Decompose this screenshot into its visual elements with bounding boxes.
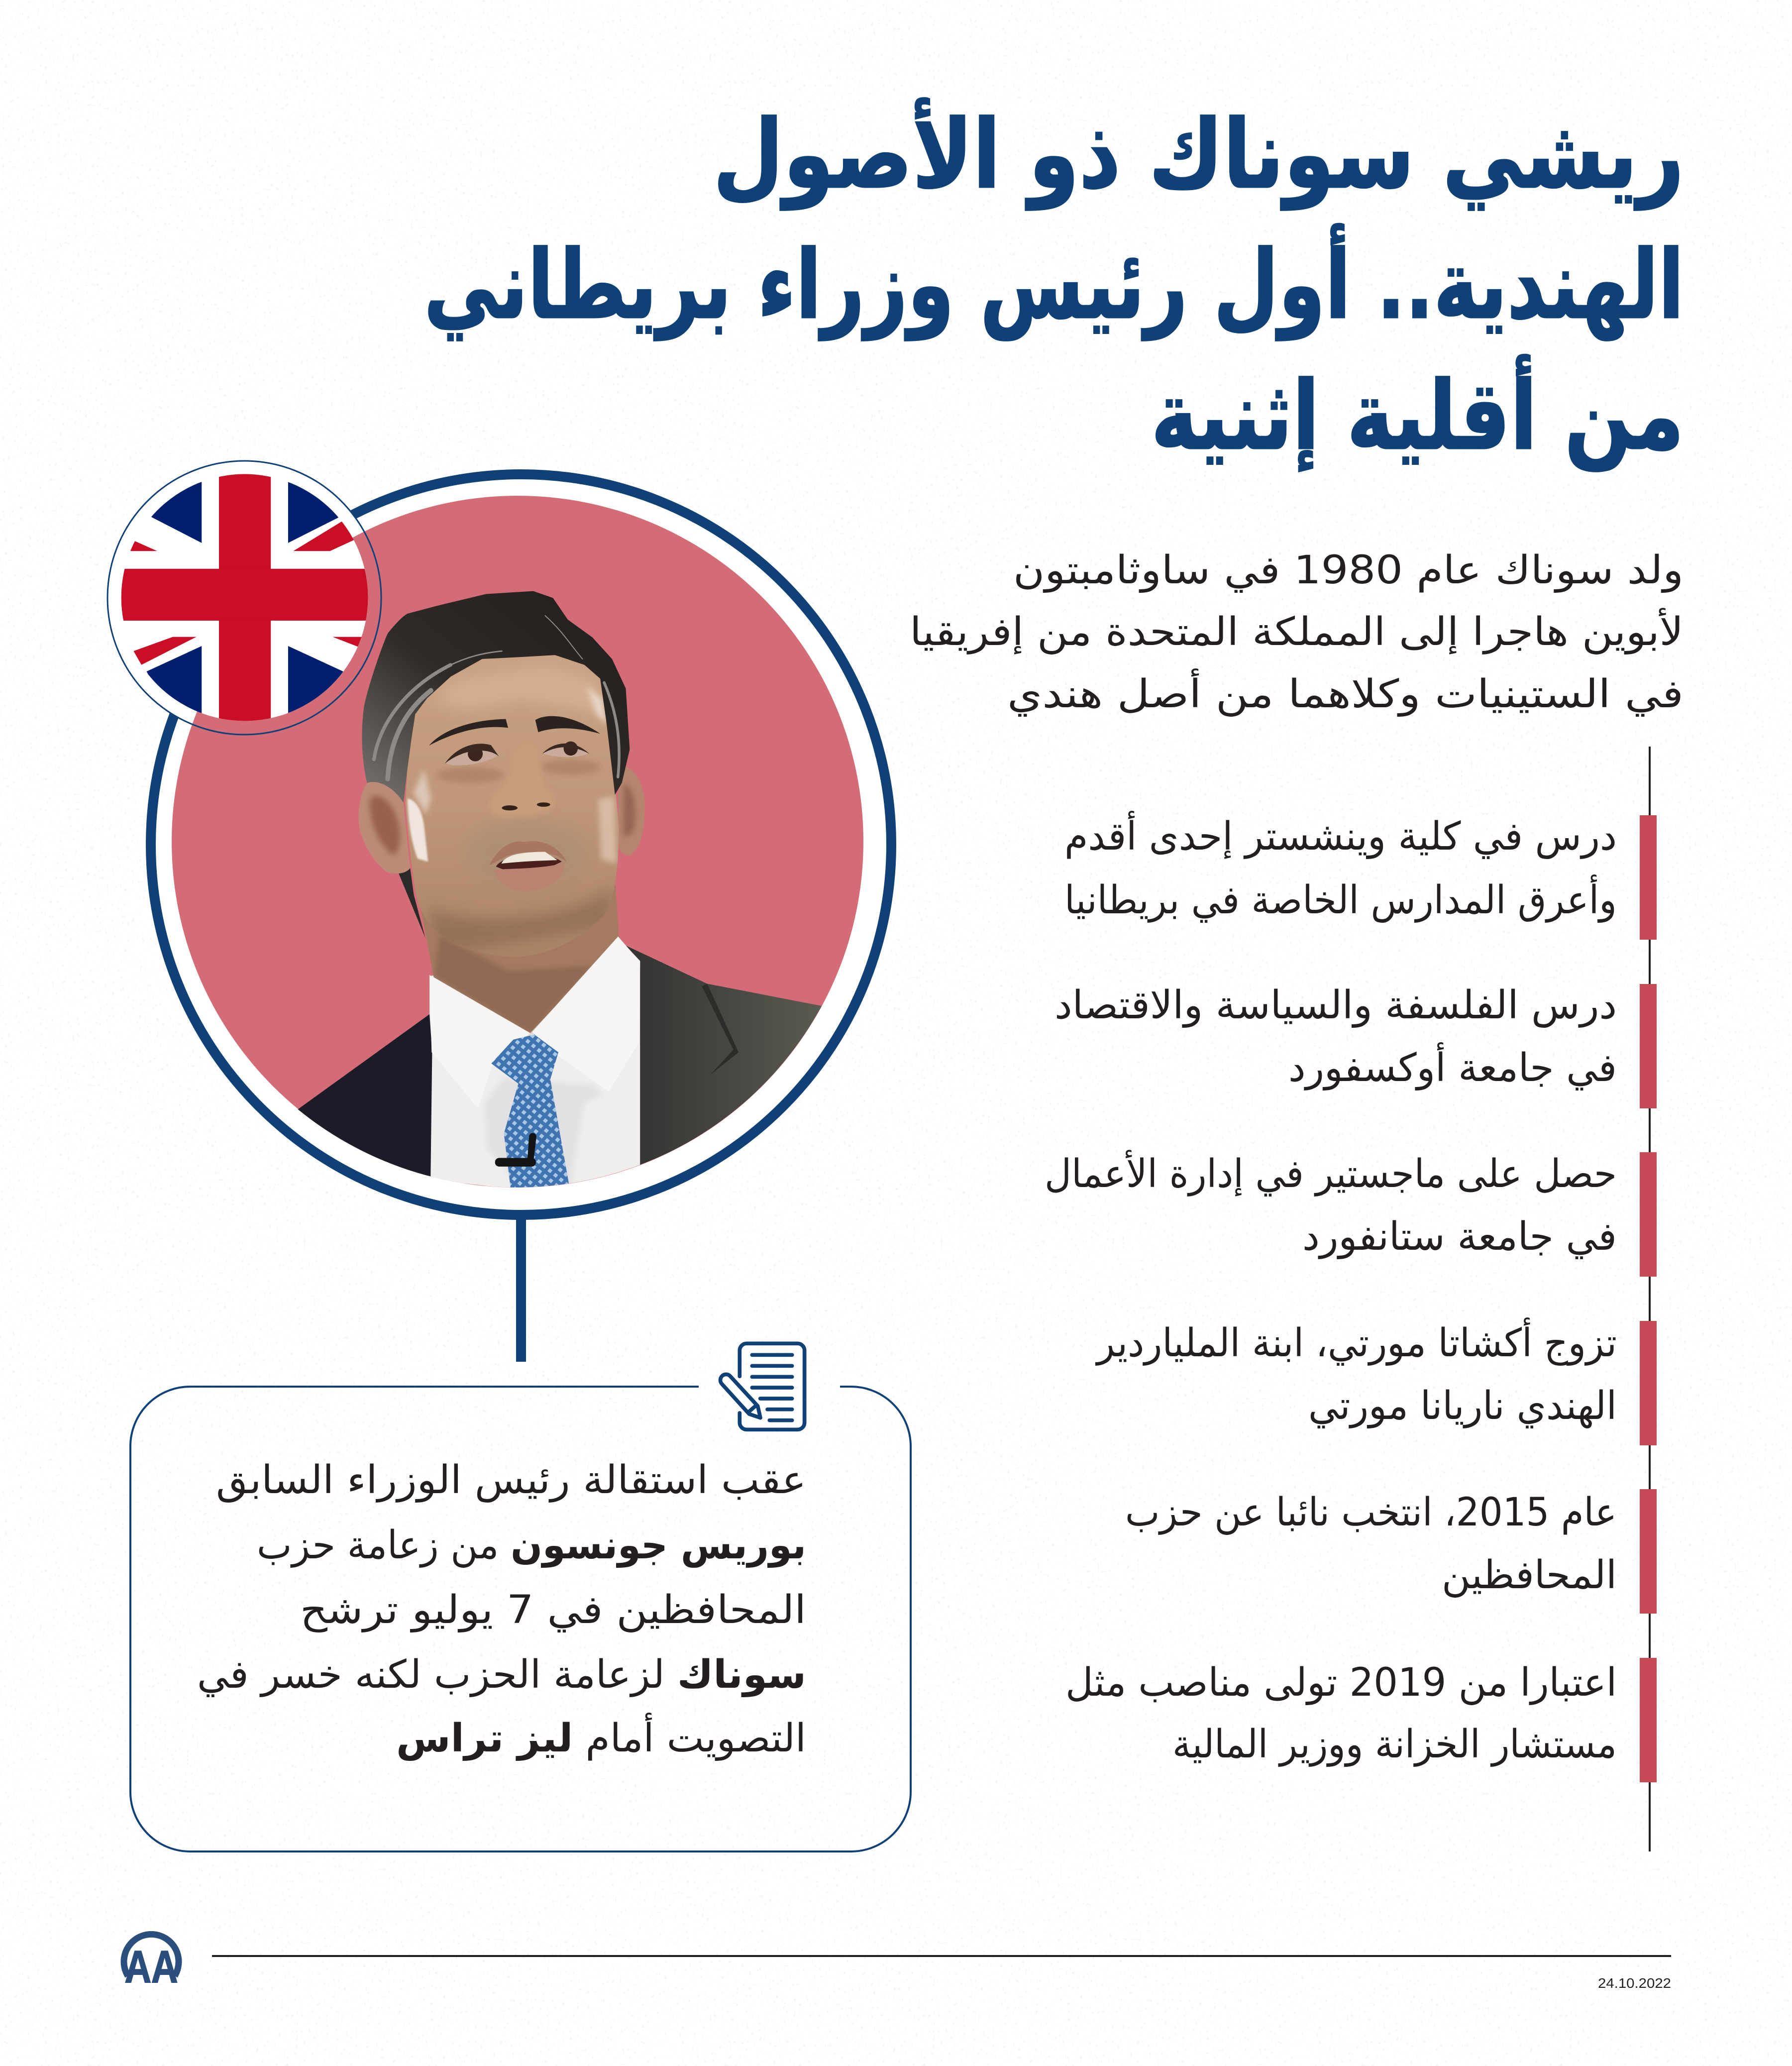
head [359, 591, 644, 957]
left cheek upper shine [413, 769, 431, 814]
timeline rule [1649, 747, 1651, 1851]
timeline item 6 [1065, 1658, 1657, 1782]
flag badge [107, 461, 863, 1188]
intro paragraph: ولد سوناك عام 1980 في ساوثامبتون [1013, 548, 1684, 593]
footer rule [212, 1955, 1671, 1957]
forehead right shine [586, 686, 607, 724]
AA logo: AA [124, 1942, 178, 1992]
timeline item 5 [1125, 1489, 1657, 1614]
left cheek white shine [408, 799, 428, 862]
timeline item 2: درس الفلسفة والسياسة والاقتصاد [1054, 983, 1617, 1028]
eyebrow right [535, 716, 600, 734]
callout text [197, 1458, 806, 1761]
icon: document and pencil [721, 1343, 805, 1429]
date: 24.10.2022 [1598, 1975, 1671, 1991]
portrait ring [151, 474, 891, 1215]
ear right [618, 767, 644, 856]
timeline item 6: مستشار الخزانة ووزير المالية [1172, 1722, 1617, 1767]
neck [420, 885, 619, 1033]
timeline item 2: في جامعة أوكسفورد [1288, 1042, 1617, 1091]
nose [490, 743, 554, 817]
timeline item 5: المحافظين [1442, 1553, 1617, 1598]
callout text: سوناك لزعامة الحزب لكنه خسر في [197, 1652, 806, 1698]
shirt [429, 938, 640, 1195]
collar right [532, 937, 640, 1092]
timeline item 6: اعتبارا من 2019 تولى مناصب مثل [1065, 1660, 1617, 1706]
hair [362, 591, 630, 803]
forehead light [431, 665, 608, 722]
tie [491, 1035, 570, 1190]
callout text: المحافظين في 7 يوليو ترشح [300, 1588, 806, 1633]
timeline item 5: عام 2015، انتخب نائبا عن حزب [1125, 1490, 1617, 1535]
badge outline [107, 461, 381, 735]
back hair low [397, 865, 425, 938]
callout box outline [130, 1387, 911, 1851]
badge paper cut-out hides the ring [107, 461, 381, 735]
intro paragraph [910, 548, 1684, 717]
title: من أقلية إثنية [1151, 355, 1684, 472]
timeline item 1 [1064, 811, 1657, 940]
mouth [489, 841, 567, 891]
pink disc showing through badge [172, 496, 863, 1188]
jacket left [296, 1014, 432, 1178]
eyebrow left [429, 719, 508, 746]
timeline item 3: في جامعة ستانفورد [1302, 1214, 1617, 1260]
callout text: التصويت أمام ليز تراس [396, 1713, 806, 1761]
timeline item 1: وأعرق المدارس الخاصة في بريطانيا [1064, 874, 1617, 923]
body [296, 865, 825, 1195]
timeline item 4: الهندي ناريانا مورتي [1308, 1384, 1617, 1429]
pink disc [172, 496, 863, 1188]
eye right [542, 742, 589, 757]
title [424, 98, 1684, 472]
timeline item 1: درس في كلية وينشستر إحدى أقدم [1064, 811, 1617, 860]
right cheek shine [598, 797, 617, 864]
intro paragraph: في الستينيات وكلاهما من أصل هندي [1007, 668, 1684, 717]
hair grey streaks [374, 616, 619, 779]
portrait ring connector [516, 1214, 526, 1362]
portrait photo [172, 496, 863, 1195]
microphone [495, 1133, 536, 1167]
callout text: عقب استقالة رئيس الوزراء السابق [216, 1458, 806, 1503]
under-eye shade [437, 767, 504, 783]
timeline item 3 [1045, 1150, 1657, 1277]
union flag [115, 468, 377, 727]
timeline item 4 [1095, 1317, 1657, 1445]
shirt shading [485, 1078, 602, 1185]
timeline item 3: حصل على ماجستير في إدارة الأعمال [1045, 1150, 1617, 1197]
collar left [429, 975, 530, 1053]
timeline item 2 [1054, 983, 1657, 1108]
callout text: بوريس جونسون من زعامة حزب [257, 1523, 806, 1568]
jacket right [626, 946, 825, 1167]
eye left [445, 744, 499, 765]
intro paragraph: لأبوين هاجرا إلى المملكة المتحدة من إفريقيا [910, 608, 1684, 655]
ear left [359, 782, 411, 873]
timeline item 4: تزوج أكشاتا مورتي، ابنة الملياردير [1095, 1317, 1617, 1366]
stubble [466, 820, 584, 883]
face [406, 655, 619, 957]
